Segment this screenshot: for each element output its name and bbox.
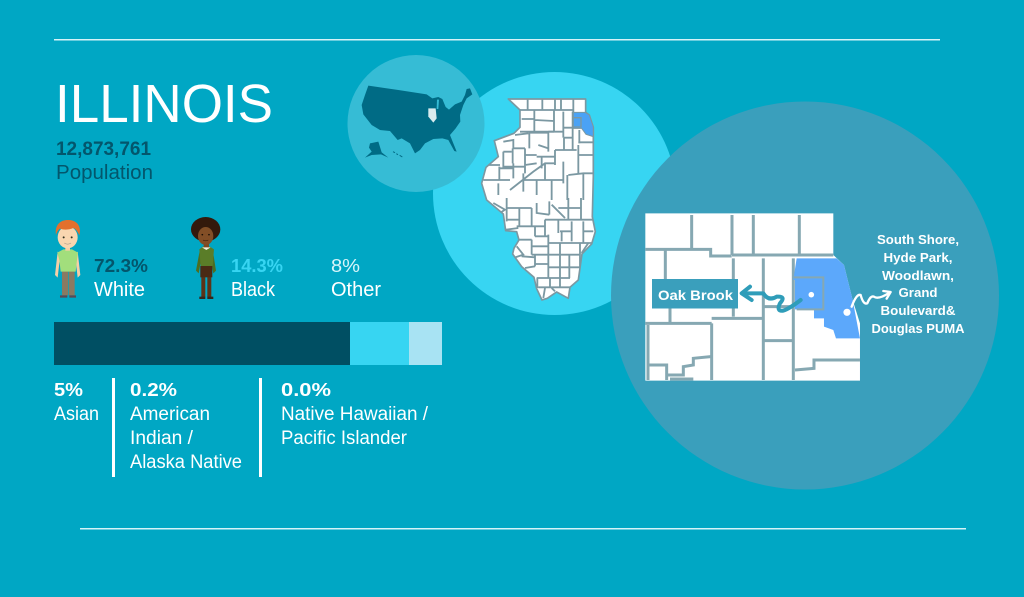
population figure: Population [56, 162, 153, 184]
stat: asian: Asian [54, 404, 99, 425]
stat: asian [54, 380, 99, 425]
stat: black: 14.3% [231, 256, 283, 276]
usa circle [348, 55, 484, 192]
stat: american indian [130, 380, 242, 473]
title: ILLINOIS [55, 74, 273, 134]
stat: black [231, 256, 283, 301]
illinois county map [482, 99, 595, 300]
usa map [362, 86, 472, 158]
label: south side: Boulevard& [880, 304, 956, 318]
label: south side: Woodlawn, [882, 269, 954, 283]
label: south side: South Shore, [877, 233, 959, 247]
stat: white: 72.3% [94, 256, 148, 276]
stat: white [94, 256, 148, 301]
icon: black person [191, 217, 220, 299]
stat: native hawaiian: Pacific Islander [281, 428, 408, 449]
stat: native hawaiian [281, 380, 429, 449]
zoomed county map [645, 213, 860, 381]
stat: native hawaiian: Native Hawaiian / [281, 404, 429, 425]
stacked bar chart [54, 322, 442, 365]
label: oak brook [652, 279, 738, 308]
stat: american indian: American [130, 404, 210, 425]
stat: asian: 5% [54, 380, 83, 400]
label: south side: Grand [898, 286, 938, 300]
highlighted counties [573, 112, 593, 137]
stat: native hawaiian: 0.0% [281, 380, 331, 400]
stat: american indian: Alaska Native [130, 452, 242, 473]
stat: american indian: Indian / [130, 428, 194, 449]
label: oak brook: Oak Brook [658, 287, 733, 303]
icon: white person [55, 220, 80, 298]
arrow: to oak brook [742, 287, 801, 311]
label: south side: Hyde Park, [884, 251, 952, 265]
stat: other [331, 256, 381, 301]
arrow: to south side [852, 291, 891, 307]
label: south side: Douglas PUMA [872, 322, 964, 336]
stat: other: 8% [331, 256, 360, 276]
stat: white: White [94, 279, 145, 301]
stat: american indian: 0.2% [130, 380, 177, 400]
illinois circle [433, 72, 676, 315]
dot: oak brook [808, 292, 814, 298]
zoom circle [611, 102, 999, 490]
dot: south shore [843, 309, 851, 316]
label: south side [872, 233, 964, 336]
stat: other: Other [331, 279, 381, 301]
population figure [56, 139, 153, 184]
population figure: 12,873,761 [56, 139, 151, 160]
stat: black: Black [231, 279, 276, 301]
